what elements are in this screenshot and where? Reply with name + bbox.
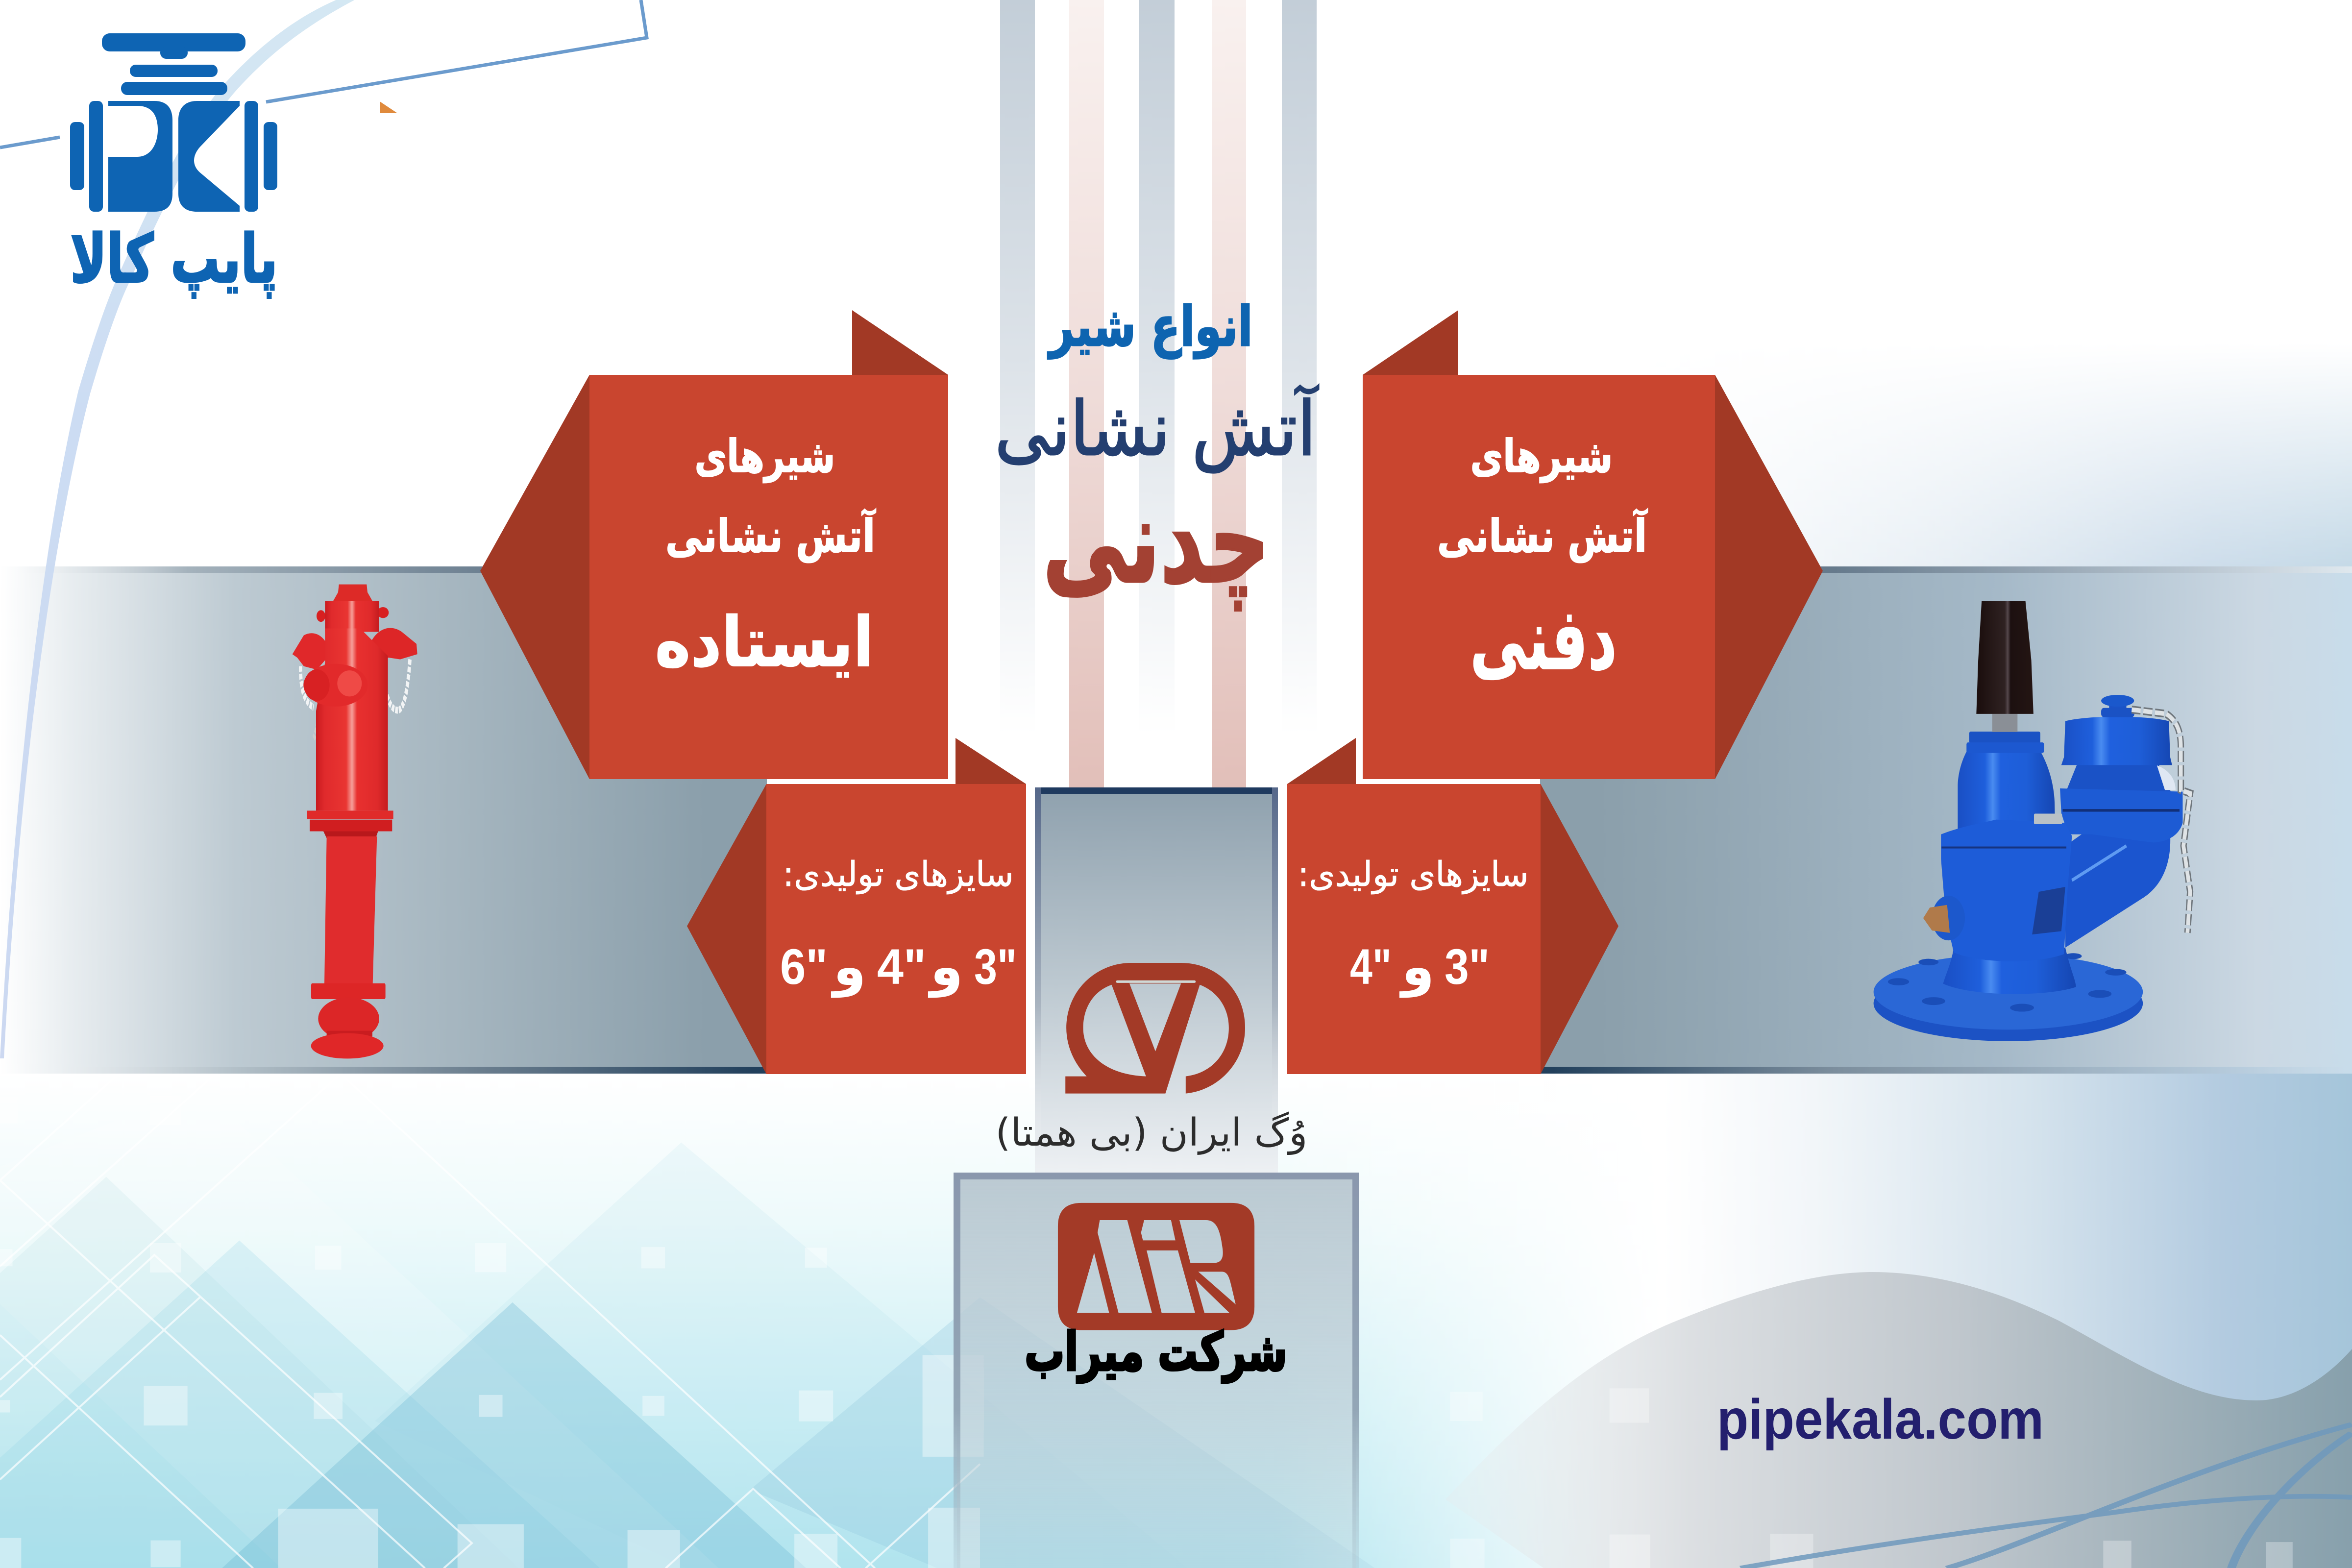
logo: Pipekala (70, 33, 277, 298)
panel: right sizes (1287, 738, 1618, 1074)
sizes values: و (1399, 936, 1435, 998)
sizes label: سایزهای تولیدی: (1298, 854, 1529, 894)
background: faint pattern rectangles on the hill (1450, 1388, 2293, 1568)
sizes label: سایزهای تولیدی: (783, 854, 1013, 894)
website address: pipekala.com (1717, 1388, 2044, 1451)
horizontal grey band: right (1540, 566, 2352, 1074)
chains (300, 660, 410, 738)
banner text: آتش نشانی (665, 509, 876, 563)
frame line top left (0, 0, 647, 147)
sizes values: 6" (780, 939, 828, 995)
logo text: پایپ کالا: پایپ کالا (71, 220, 277, 298)
base flange (1874, 966, 2143, 1041)
small orange mark (380, 101, 397, 113)
front cap (303, 664, 368, 707)
elbow pipe (2065, 833, 2170, 948)
background: geometric triangle pattern (0, 1029, 1666, 1568)
ears (317, 610, 325, 622)
banner text: دفنی (1470, 590, 1617, 689)
product: red standing hydrant (293, 585, 417, 1058)
background: blue curved lines bottom right (1741, 1424, 2352, 1568)
banner text: شیرهای (695, 430, 835, 483)
lower flange (311, 983, 386, 999)
vertical stripes (1000, 0, 1317, 789)
banner text: شیرهای (1470, 430, 1613, 483)
bolt (2034, 814, 2062, 824)
sizes values (1350, 936, 1490, 998)
upper body (316, 628, 388, 810)
panel: centre column (1035, 787, 1278, 1176)
chain (2132, 710, 2190, 933)
main body (1941, 820, 2072, 961)
panel: buried valves banner (1363, 310, 1823, 779)
icon: VOG Iran logo (1065, 963, 1245, 1094)
title (995, 295, 1319, 611)
outlet lower flange (2060, 788, 2182, 843)
background: upper right blue haze (1617, 343, 2352, 588)
panel: lower brand box (957, 1176, 1356, 1568)
background: lower right blue haze (1274, 1073, 2352, 1568)
sizes values: 3" (1445, 939, 1490, 995)
outlet cap (2061, 717, 2172, 765)
horizontal grey band: left (0, 566, 767, 1074)
right outlet (371, 628, 417, 660)
background: grey hill behind website address (1446, 1272, 2352, 1568)
sizes values: و (928, 936, 963, 998)
product: blue buried hydrant (1874, 601, 2190, 1041)
black handle (1976, 601, 2034, 714)
banner text: ایستاده (655, 603, 874, 683)
heading line 1: انواع شیر (1048, 295, 1252, 359)
icon: Mirab logo (1058, 1203, 1254, 1330)
top cap (333, 585, 372, 601)
base flange (311, 1033, 384, 1058)
banner text: آتش نشانی (1437, 509, 1648, 563)
sizes values: 4" (1350, 939, 1392, 995)
upper flange (307, 810, 393, 819)
sizes values: 3" (974, 939, 1017, 995)
neck (325, 601, 379, 632)
window opening (2032, 887, 2065, 934)
icon: valve mark (70, 33, 277, 212)
panel: standing valves banner (480, 310, 948, 779)
left outlet (293, 633, 326, 670)
bolt holes (1888, 953, 2127, 1012)
outlet neck (2065, 760, 2172, 793)
ball (318, 997, 379, 1040)
heading line 2: آتش نشانی (995, 385, 1319, 473)
dome collar (1969, 732, 2040, 743)
brand name: VOG Iran: وُگ ایران (بی همتا) (996, 1111, 1307, 1155)
dome (1958, 751, 2055, 836)
banner text (655, 430, 876, 683)
panel: left sizes (687, 738, 1026, 1074)
banner text (1437, 430, 1648, 689)
brand name: Mirab: شرکت میراب (1025, 1322, 1287, 1383)
heading line 3: چدنی (1043, 472, 1270, 611)
cap knob (2109, 701, 2127, 714)
background: pale sweeping arc (0, 0, 360, 1058)
sizes values: 4" (877, 939, 926, 995)
drain boss (1932, 896, 1965, 940)
flange cone (1943, 948, 2076, 994)
lower pipe (324, 836, 377, 984)
brass nozzle (1923, 905, 1950, 933)
stem (1992, 714, 2017, 732)
sizes values: و (831, 936, 866, 998)
sizes values (780, 936, 1017, 998)
